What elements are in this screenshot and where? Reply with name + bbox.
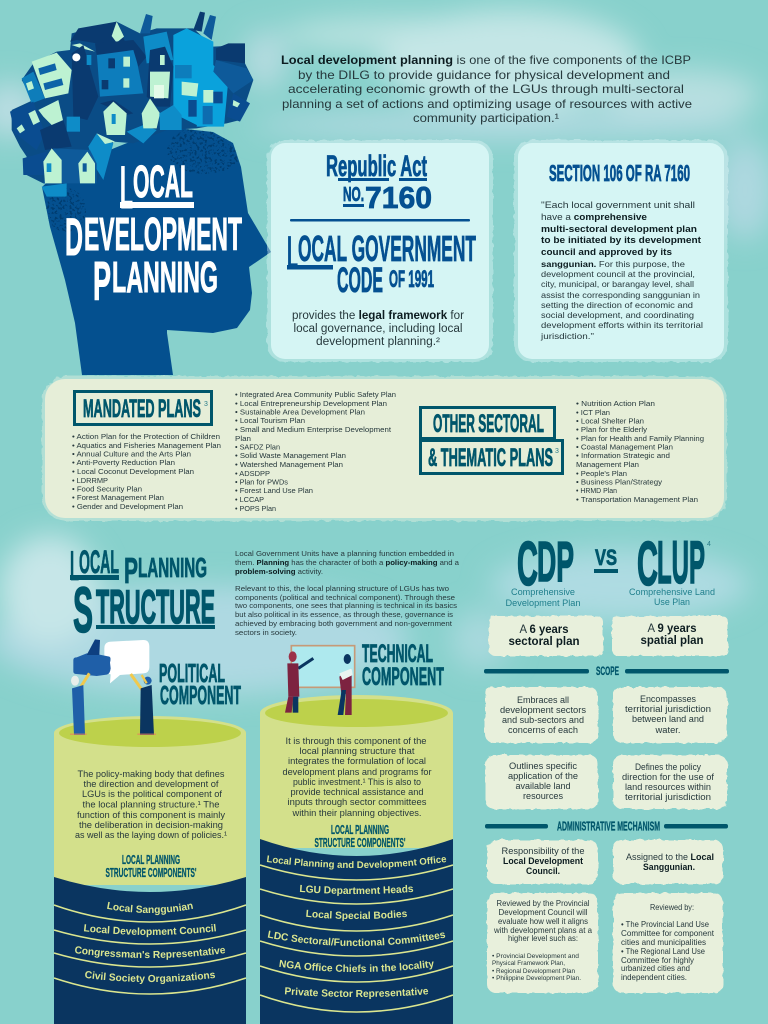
list: other sectoral plans <box>576 399 704 504</box>
text: political description <box>75 769 227 840</box>
list: other sectoral plans: • Coastal Management Plan <box>576 442 673 452</box>
card: reviewed by provincial council: evaluate how well it aligns <box>498 916 588 926</box>
figure: listener <box>338 654 353 715</box>
list: other sectoral plans: • Nutrition Action Plan <box>576 399 655 408</box>
label: comprehensive development plan: Comprehensive <box>511 587 575 597</box>
text: technical description: development plans and programs for <box>282 767 432 777</box>
divider: scope <box>484 664 729 678</box>
list: mandated plans column 1: • Annual Culture and the Arts Plan <box>72 450 191 458</box>
text: planning structure description: but also political in its essence, as through these, governance is <box>235 610 453 619</box>
card: outlines specific application: application of the <box>508 771 578 782</box>
text: section quote: multi-sectoral development plan <box>541 224 697 235</box>
card: 9 years spatial plan: A 9 years <box>648 621 697 635</box>
card: 9 years spatial plan: spatial plan <box>640 633 704 647</box>
card: embraces all development sectors: development sectors <box>500 705 586 716</box>
list: other sectoral plans: • People's Plan <box>576 469 627 478</box>
list: mandated plans column 2: • Integrated Area Community Public Safety Plan <box>235 390 396 399</box>
list: mandated plans column 2: • POPS Plan <box>235 504 276 513</box>
list: mandated plans column 2: • Sustainable Area Development Plan <box>235 408 365 416</box>
card: encompasses territorial jurisdiction: water. <box>655 725 680 736</box>
card: defines the policy direction: Defines the policy <box>635 762 701 773</box>
labels: technical members <box>266 855 446 999</box>
intro text: by the DILG to provide guidance for physical development and <box>298 68 670 82</box>
text: political description: function of this component is mainly <box>77 810 225 820</box>
text: section quote: council and approved by its <box>541 247 672 258</box>
heading: political structure components: LOCAL PLANNING <box>122 853 180 867</box>
cylinder: political component <box>54 716 246 1024</box>
comparison: CDP vs CLUP heading: DP <box>537 530 574 594</box>
heading: technical structure components <box>314 823 406 850</box>
card: reviewed by provincial council <box>487 893 598 993</box>
panel: Section 106 of RA 7160 <box>514 140 728 362</box>
text: planning structure description: problem-solving activity. <box>235 567 323 576</box>
card: reviewed by land use committee: cities and municipalities <box>621 937 706 947</box>
text: section quote: social development, and coordinating <box>541 310 694 320</box>
text: planning structure description: components (political and technical component). Through these <box>235 593 455 602</box>
heading: Republic Act No. 7160: NO. <box>343 184 364 206</box>
card: responsibility of LDC: Responsibility of the <box>502 846 584 857</box>
head illustration with city and title: EVELOPMENT <box>84 208 242 260</box>
intro text: planning a set of actions and optimizing usage of resources with active <box>282 97 692 111</box>
heading: local planning structure: S <box>73 574 93 646</box>
comparison: CDP vs CLUP heading: VS <box>595 545 617 570</box>
card: assigned to local sanggunian: Assigned to the Local <box>626 852 714 863</box>
comparison: CDP vs CLUP heading: C <box>637 530 658 599</box>
heading: other sectoral and thematic plans: & THEMATIC PLANS <box>428 444 553 472</box>
labels: technical members: Local Special Bodies <box>306 910 407 921</box>
heading: Local Government Code of 1991: CODE <box>337 261 383 300</box>
card: encompasses territorial jurisdiction <box>613 687 727 743</box>
labels: political members: Congressman's Representative <box>75 946 226 960</box>
list: other sectoral plans: • Local Shelter Plan <box>576 416 644 426</box>
text: section quote: "Each local government unit shall <box>541 200 695 211</box>
text: TRUCTURE <box>96 580 215 633</box>
divider: administrative mechanism: ADMINISTRATIVE MECHANISM <box>557 818 660 834</box>
text: technical description: provide technical assistance and <box>290 787 424 797</box>
intro text <box>281 53 692 125</box>
card: reviewed by land use committee: Committee for component <box>621 928 715 938</box>
text: technical description: within their planning objectives. <box>291 808 422 818</box>
card: defines the policy direction <box>613 755 727 809</box>
title: local development planning: OCAL <box>133 156 193 207</box>
list: mandated plans column 2: • SAFDZ Plan <box>235 442 280 452</box>
list: mandated plans column 1: • Aquatics and Fisheries Management Plan <box>72 441 221 450</box>
labels: political members <box>75 902 226 984</box>
heading: Republic Act No. 7160 <box>326 150 432 215</box>
list: mandated plans column 2: • Local Tourism Plan <box>235 416 305 425</box>
list: mandated plans column 2: • Plan for PWDs <box>235 478 288 486</box>
text: political description: the local planning structure.¹ The <box>82 800 220 810</box>
label: comprehensive development plan: Development Plan <box>506 598 580 608</box>
intro text: community participation.¹ <box>413 111 559 125</box>
labels: technical members: NGA Office Chiefs in the locality <box>279 960 434 972</box>
figure: left person <box>70 673 89 735</box>
text: section quote: setting the direction of economic and <box>541 300 693 310</box>
list: mandated plans column 2: • Local Entrepreneurship Development Plan <box>235 399 387 408</box>
card: reviewed by land use committee: • The Regional Land Use <box>621 946 705 956</box>
list: mandated plans column 1 <box>72 432 221 511</box>
heading: political component <box>159 658 241 710</box>
card: reviewed by land use committee: urbanized cities and <box>621 963 690 973</box>
card: reviewed by land use committee: • The Provincial Land Use <box>621 919 709 929</box>
card: embraces all development sectors: Embraces all <box>517 695 569 706</box>
text: planning structure description: achieved by embracing both government and non-government <box>235 619 452 628</box>
cylinder: technical component <box>260 695 454 1024</box>
card: outlines specific application <box>485 755 598 809</box>
panel: Republic Act 7160: OCAL GOVERNMENT <box>298 228 476 269</box>
heading: political component: POLITICAL <box>159 658 225 688</box>
comparison: CDP vs CLUP heading <box>506 529 715 608</box>
list: other sectoral plans: • ICT Plan <box>576 408 610 417</box>
card: reviewed by provincial council: Development Council will <box>498 907 588 917</box>
text: section quote: sanggunian. For this purpose, the <box>541 259 685 269</box>
list: other sectoral plans: • Information Strategic and <box>576 451 670 460</box>
card: reviewed by provincial council: • Provincial Development and <box>492 953 579 960</box>
card: outlines specific application: Outlines specific <box>509 761 577 772</box>
card: defines the policy direction: land resources within <box>625 782 711 793</box>
heading: political structure components <box>106 853 196 880</box>
text: technical description: local planning structure that <box>300 746 415 756</box>
heading: other sectoral and thematic plans: 3 <box>555 448 559 455</box>
divider: administrative mechanism <box>485 818 728 834</box>
list: other sectoral plans: • Plan for Health and Family Planning <box>576 434 704 443</box>
text: legal framework: local governance, including local <box>294 323 462 335</box>
heading: technical component <box>362 640 444 691</box>
labels: technical members: LDC Sectoral/Functional Committees <box>268 930 446 946</box>
text: political description: as well as the laying down of policies.¹ <box>75 830 227 840</box>
list: mandated plans column 2: • LCCAP <box>235 495 264 504</box>
title: local development planning: LANNING <box>112 253 218 302</box>
icon: speech bubble <box>104 640 149 683</box>
panel: Republic Act 7160 <box>267 140 493 362</box>
card: responsibility of LDC: Council. <box>526 866 560 877</box>
icon: thumbs up <box>73 639 111 676</box>
text: planning structure description <box>235 549 460 637</box>
heading: other sectoral and thematic plans: OTHER SECTORAL <box>433 410 544 438</box>
labels: technical members: Private Sector Representative <box>284 987 428 999</box>
text: political description: LGUs is the political component of <box>82 789 222 799</box>
text: section quote: to be initiated by its development <box>541 235 702 246</box>
list: other sectoral plans: • HRMD Plan <box>576 486 617 495</box>
icon: presentation board <box>291 646 355 687</box>
title: local development planning: P <box>93 250 111 312</box>
labels: political members: Local Development Council <box>84 924 216 938</box>
heading: Republic Act No. 7160: Republic Act <box>326 150 427 183</box>
heading: local planning structure: P <box>124 550 138 591</box>
heading: technical structure components: LOCAL PLANNING <box>331 823 389 837</box>
heading: Republic Act No. 7160: 7160 <box>365 180 432 215</box>
card: reviewed by provincial council: • Regional Development Plan <box>492 968 575 975</box>
title: local development planning: L <box>120 154 133 221</box>
comparison: CDP vs CLUP heading: 4 <box>707 541 711 548</box>
card: assigned to local sanggunian <box>613 840 723 884</box>
card: 9 years spatial plan <box>612 616 728 656</box>
text: section quote: have a comprehensive <box>541 212 647 223</box>
card: reviewed by provincial council: Reviewed by the Provincial <box>496 898 590 908</box>
card: reviewed by land use committee: independent cities. <box>621 972 687 982</box>
card: outlines specific application: resources <box>523 791 563 802</box>
list: mandated plans column 1: • Anti-Poverty Reduction Plan <box>72 458 175 467</box>
title: local development planning <box>65 154 242 312</box>
head silhouette <box>42 127 271 375</box>
text: legal framework: development planning.² <box>316 336 440 348</box>
heading: mandated plans <box>74 392 212 424</box>
card: reviewed by provincial council: with development plans at a <box>493 925 592 935</box>
head illustration with city and title <box>10 12 271 375</box>
text: section quote <box>540 200 703 341</box>
text: legal framework: provides the legal framework for <box>292 310 464 322</box>
list: other sectoral plans: • Plan for the Elderly <box>576 425 647 434</box>
list: mandated plans column 1: • Local Coconut Development Plan <box>72 467 194 476</box>
text: planning structure description: Local Government Units have a planning function embedded in <box>235 549 454 558</box>
card: reviewed by provincial council: Physical Framework Plan, <box>492 960 565 967</box>
labels: technical members: Local Planning and Development Office <box>266 855 446 870</box>
card: outlines specific application: available land <box>516 781 570 792</box>
illustration: technical figures <box>285 646 355 715</box>
text: section quote: development council at the provincial, <box>541 269 695 279</box>
illustration: political figures <box>70 639 156 735</box>
card: 6 years sectoral plan: A 6 years <box>520 622 569 636</box>
list: mandated plans column 2: • Watershed Management Plan <box>235 460 343 469</box>
comparison: CDP vs CLUP heading: C <box>517 530 538 599</box>
text: technical description: integrates the formulation of local <box>288 756 426 766</box>
card: reviewed by land use committee: Committee for highly <box>621 955 695 965</box>
panel: plans <box>42 376 727 521</box>
list: mandated plans column 1: • Action Plan for the Protection of Children <box>72 432 220 441</box>
card: embraces all development sectors: and sub-sectors and <box>502 715 584 726</box>
list: other sectoral plans: • Transportation Management Plan <box>576 495 698 504</box>
card: 6 years sectoral plan <box>489 616 603 656</box>
heading: technical component: COMPONENT <box>362 663 444 691</box>
heading: technical component: TECHNICAL <box>362 640 433 668</box>
heading: local planning structure: L <box>70 542 79 589</box>
list: mandated plans column 1: • Forest Management Plan <box>72 493 164 502</box>
heading: other sectoral and thematic plans <box>420 408 562 474</box>
text: political description: The policy-making body that defines <box>78 769 225 779</box>
text: COMPONENT <box>160 680 241 710</box>
list: mandated plans column 2: • Solid Waste Management Plan <box>235 451 346 460</box>
heading: local planning structure: OCAL <box>79 544 119 580</box>
heading: mandated plans: MANDATED PLANS <box>83 395 201 423</box>
text: section quote: jurisdiction." <box>540 331 594 341</box>
card: reviewed by land use committee <box>613 893 723 993</box>
list: mandated plans column 2: Plan <box>235 434 251 443</box>
card: embraces all development sectors <box>485 687 598 743</box>
labels: political members: Local Sanggunian <box>107 902 193 916</box>
head speckle texture <box>46 126 243 232</box>
heading: technical structure components: STRUCTURE COMPONENTS' <box>314 835 406 850</box>
list: mandated plans column 2: • ADSDPP <box>235 469 270 478</box>
heading: Local Government Code of 1991: OF 1991 <box>389 266 434 293</box>
card: encompasses territorial jurisdiction: Encompasses <box>640 694 696 705</box>
divider: scope: SCOPE <box>596 664 619 678</box>
text: planning structure description: two components, one sees that planning is technical in its basics <box>235 601 457 610</box>
label: comprehensive development plan <box>506 587 715 608</box>
card: encompasses territorial jurisdiction: territorial jurisdiction <box>625 704 711 715</box>
card: reviewed by provincial council: • Philippine Development Plan. <box>492 975 581 982</box>
list: mandated plans column 2: • Small and Medium Enterprise Development <box>235 425 392 434</box>
card: assigned to local sanggunian: Sanggunian. <box>643 862 695 873</box>
card: 6 years sectoral plan: sectoral plan <box>508 634 580 648</box>
list: other sectoral plans: • Business Plan/Strategy <box>576 478 662 486</box>
text: technical description: inputs through sector committees <box>288 797 427 807</box>
list: mandated plans column 1: • Food Security Plan <box>72 484 142 494</box>
label: comprehensive development plan: Comprehensive Land <box>629 587 715 597</box>
list: mandated plans column 1: • Gender and Development Plan <box>72 502 183 511</box>
text: section quote: assist the corresponding sanggunian in <box>541 290 700 300</box>
list: mandated plans column 2 <box>235 390 396 513</box>
text: planning structure description: Relevant to this, the local planning structure of LGUs has two <box>235 584 449 593</box>
text: technical description: public investment.¹ This is also to <box>293 777 421 787</box>
title: local development planning: D <box>65 208 83 267</box>
card: reviewed by land use committee: Reviewed by: <box>650 902 694 912</box>
intro text: Local development planning is one of the five components of the ICBP <box>281 53 691 67</box>
list: other sectoral plans: Management Plan <box>576 460 639 469</box>
heading: mandated plans: 3 <box>204 401 208 408</box>
figure: right person <box>131 674 156 735</box>
list: mandated plans column 2: • Forest Land Use Plan <box>235 486 313 495</box>
card: reviewed by provincial council: higher level such as: <box>508 933 578 943</box>
list: mandated plans column 1: • LDRRMP <box>72 476 108 485</box>
card: defines the policy direction: direction for the use of <box>622 772 714 783</box>
card: encompasses territorial jurisdiction: between land and <box>632 714 704 725</box>
text: legal framework <box>292 310 464 348</box>
text: political description: the deliberation in decision-making <box>79 820 223 830</box>
text: planning structure description: them. Planning has the character of both a policy-making and a <box>235 558 460 567</box>
heading: local planning structure <box>70 542 215 646</box>
text: section quote: development efforts within its territorial <box>541 320 703 330</box>
text: political description: the direction and development of <box>84 779 219 789</box>
heading: political structure components: STRUCTURE COMPONENTS' <box>106 865 196 880</box>
card: embraces all development sectors: concerns of each <box>508 725 578 736</box>
card: responsibility of LDC: Local Development <box>503 856 584 867</box>
houses on head <box>10 12 253 197</box>
labels: political members: Civil Society Organizations <box>85 971 215 984</box>
label: comprehensive development plan: Use Plan <box>654 597 690 607</box>
text: planning structure description: sectors in society. <box>235 628 297 637</box>
card: defines the policy direction: territorial jurisdiction <box>625 792 711 803</box>
figure: presenter <box>285 651 313 713</box>
card: responsibility of LDC <box>487 840 598 884</box>
labels: technical members: LGU Department Heads <box>300 884 414 896</box>
heading: Local Government Code of 1991 <box>287 226 476 300</box>
heading: local planning structure: LANNING <box>138 552 207 583</box>
text: technical description <box>282 736 432 818</box>
text: technical description: It is through this component of the <box>286 736 426 746</box>
heading: Local Government Code of 1991: L <box>287 226 298 279</box>
text: section quote: city, municipal, or barangay level, shall <box>541 279 694 289</box>
intro text: accelerating economic growth of the LGUs through multi-sectoral <box>288 82 684 96</box>
